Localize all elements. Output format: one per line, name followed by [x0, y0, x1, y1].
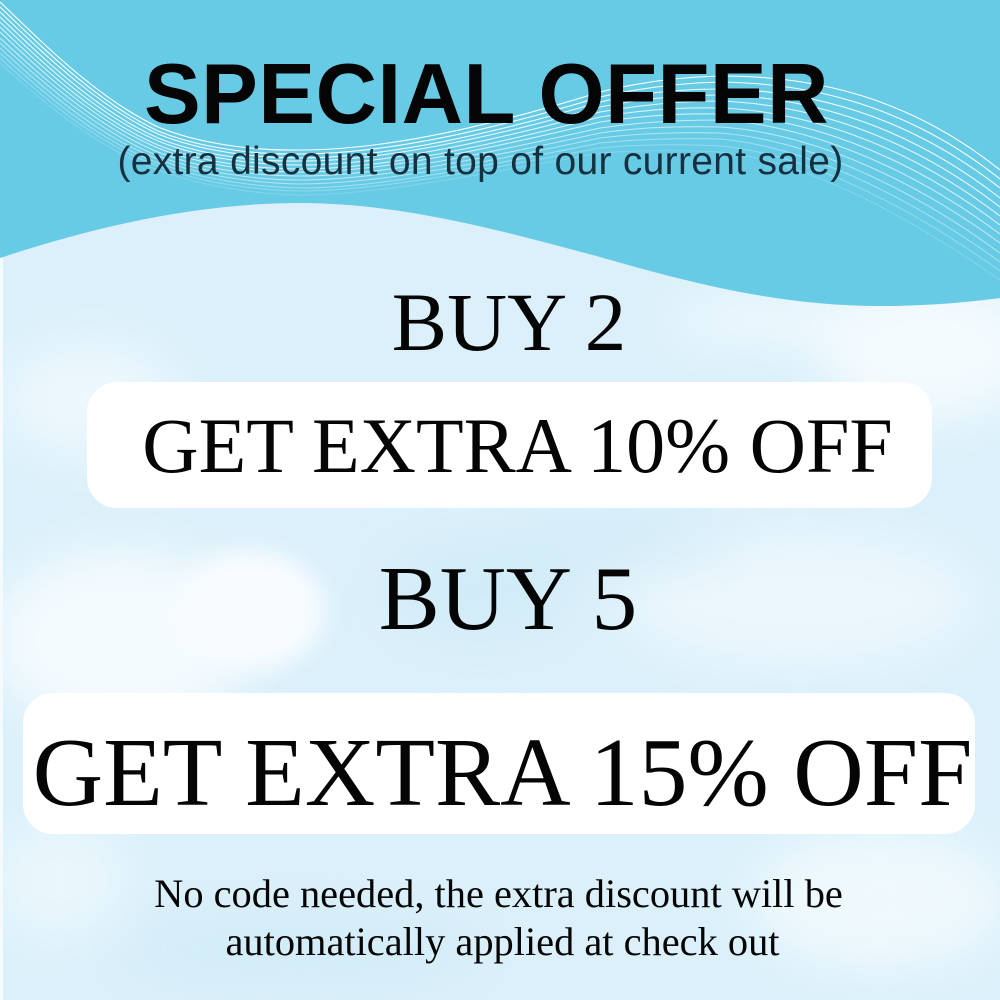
panel: extra 15% off	[23, 693, 975, 834]
subtitle: (extra discount on top of our current sale)	[117, 140, 844, 183]
title: SPECIAL OFFER	[144, 47, 829, 142]
footer note: No code needed, the extra discount will be	[154, 871, 843, 916]
heading: buy 2: BUY 2	[392, 276, 626, 368]
heading: buy 5: BUY 5	[379, 547, 637, 649]
footer note	[154, 871, 843, 964]
offer text: 15%: GET EXTRA 15% OFF	[33, 719, 972, 827]
offer text: 10%: GET EXTRA 10% OFF	[142, 402, 893, 489]
panel: extra 10% off	[87, 382, 932, 508]
footer note: automatically applied at check out	[225, 919, 780, 964]
